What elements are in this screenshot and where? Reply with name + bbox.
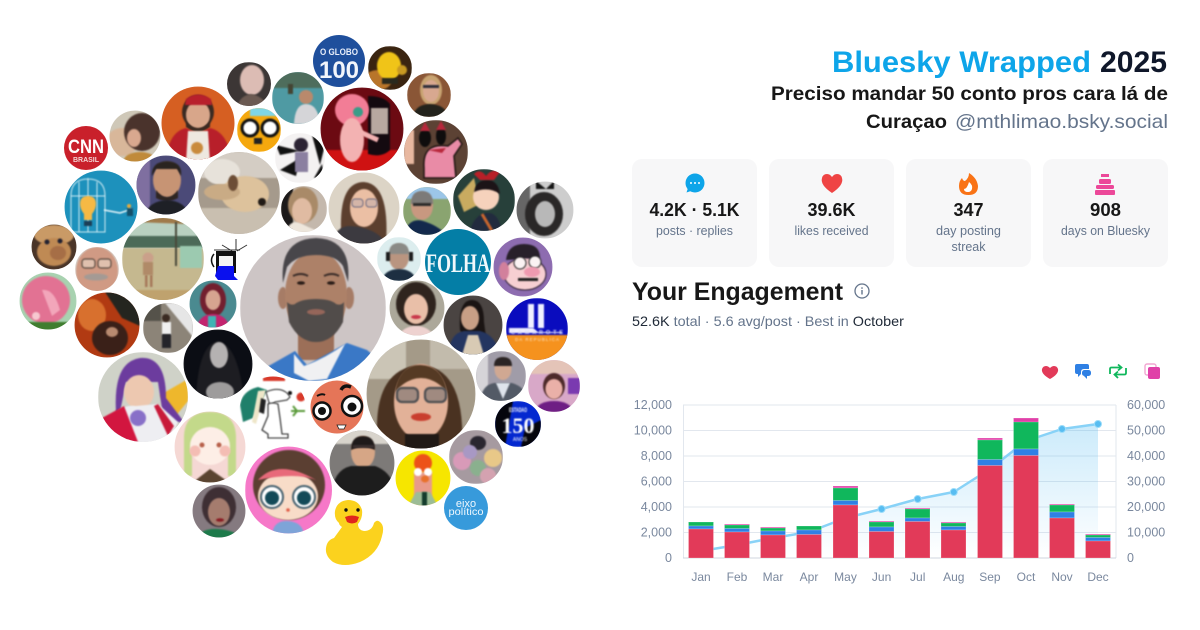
avatar: Beaker muppet on yellow <box>395 450 451 506</box>
avatar: curly haired woman with glasses <box>366 339 476 450</box>
stat card: posts and replies <box>632 159 757 267</box>
avatar: man in grey suit <box>476 351 528 401</box>
right axis: 60,000 <box>1127 398 1165 412</box>
avatar: curly haired woman smiling <box>389 280 445 336</box>
avatar: woman with purple cosplay wig <box>98 352 188 444</box>
subtitle: Preciso mandar 50 conto pros cara lá de <box>771 83 1168 105</box>
icon: chat bubble <box>686 174 704 192</box>
avatar: TV doodle <box>212 239 247 280</box>
month labels: Apr <box>800 570 818 584</box>
avatar: woman in pink-tinted room <box>528 360 580 412</box>
avatar: woman in navy blazer <box>443 295 503 355</box>
right axis: 30,000 <box>1127 474 1165 488</box>
stat card: day posting streak: day posting <box>936 224 1001 238</box>
avatar: Estadao 150 anos logo: ESTADÃO <box>509 407 527 414</box>
combo chart: monthly engagement bars with cumulative line <box>634 398 1165 584</box>
stat card: posts and replies: posts · replies <box>656 224 733 238</box>
avatar: man in black jacket <box>329 430 397 496</box>
subtitle: Curaçao <box>866 111 947 133</box>
avatar: girl with dark hair <box>226 62 272 108</box>
handle: @mthlimao.bsky.social <box>955 111 1168 133</box>
avatar: woman in black and white <box>516 181 574 239</box>
avatar: woman portrait <box>281 186 327 232</box>
avatar: Folha logo <box>425 229 491 295</box>
avatar: Estadao 150 anos logo: 150 <box>502 413 534 438</box>
avatar: older man with moustache <box>75 247 119 295</box>
right axis: 50,000 <box>1127 424 1165 438</box>
avatar: Miss Piggy <box>31 224 77 270</box>
engagement summary: 52.6K total · 5.6 avg/post · Best in October <box>632 313 904 329</box>
avatar: Folha logo: FOLHA <box>426 249 490 278</box>
avatar: chibi woman with glasses on pink <box>245 446 333 534</box>
right axis: 20,000 <box>1127 500 1165 514</box>
month labels: Oct <box>1017 570 1036 584</box>
avatar: O Globo 100 logo: 100 <box>319 57 359 84</box>
avatar: Estadao 150 anos logo <box>495 401 541 447</box>
month labels: May <box>834 570 857 584</box>
avatar: orange cartoon face <box>310 380 364 434</box>
avatar: woman with dark hair <box>110 110 160 162</box>
right axis: 10,000 <box>1127 526 1165 540</box>
icon: likes legend heart <box>1042 366 1058 379</box>
month labels: Jun <box>872 570 891 584</box>
icon: info <box>855 284 869 298</box>
stat card: days on Bluesky: 908 <box>1090 200 1121 220</box>
month labels: Mar <box>763 570 783 584</box>
avatar: O Globo 100 logo <box>313 35 365 87</box>
stat card: day posting streak: 347 <box>954 200 984 220</box>
left axis: 4,000 <box>641 500 672 514</box>
month labels: Jul <box>910 570 925 584</box>
avatar: CNN Brasil logo: CNN <box>68 137 104 158</box>
avatar: light bulb in a cage <box>64 170 140 246</box>
avatar: yellow chick robot <box>364 46 412 90</box>
avatar: man with headset <box>377 237 421 281</box>
avatar: woman with plush toys <box>449 430 503 484</box>
avatar: Eixo Politico logo: político <box>448 506 484 518</box>
month labels: Aug <box>943 570 964 584</box>
avatar: Kiki with a broom <box>453 169 515 231</box>
avatar: man with dark hair <box>136 155 196 215</box>
avatar: main profile photo, man with grey beard <box>240 235 386 383</box>
left axis <box>634 398 672 565</box>
month labels: Dec <box>1087 570 1109 584</box>
avatar: O Globo 100 logo: O GLOBO <box>320 47 358 57</box>
icon: replies legend bubbles <box>1075 364 1091 379</box>
month labels: Nov <box>1051 570 1073 584</box>
stacked bars <box>688 418 1110 558</box>
title: Bluesky Wrapped <box>832 46 1091 79</box>
right axis: 0 <box>1127 551 1134 565</box>
avatar: woman with red hair <box>189 280 237 328</box>
left axis: 0 <box>665 551 672 565</box>
stat card: days on Bluesky: days on Bluesky <box>1061 224 1151 238</box>
avatar: child on the beach <box>122 216 204 304</box>
avatar: selfie at a lake <box>272 72 324 124</box>
left axis: 6,000 <box>641 474 672 488</box>
avatar: anime girl with green hair <box>174 411 246 483</box>
stat card: likes received <box>769 159 894 267</box>
avatar: Eixo Politico logo: eixo <box>456 498 476 510</box>
cumulative line <box>701 420 1102 551</box>
avatar: dog lying on a sofa <box>198 152 280 234</box>
avatar: cartoon face on purple <box>493 237 553 297</box>
stat card: day posting streak: streak <box>952 240 986 254</box>
left axis: 2,000 <box>641 526 672 540</box>
month labels: Feb <box>727 570 748 584</box>
avatar: man with glasses in front of a lake <box>403 187 451 235</box>
icon: cake <box>1095 174 1115 195</box>
avatar: Camarote da Republica logo <box>506 298 568 361</box>
avatar: goth woman in black and white <box>183 329 253 402</box>
icon: quotes legend squares <box>1145 364 1160 379</box>
chart legend <box>1042 364 1160 379</box>
stat card: posts and replies: 4.2K · 5.1K <box>650 200 740 220</box>
title: 2025 <box>1100 46 1167 79</box>
avatar: Camarote da Republica logo: DA REPUBLICA <box>515 337 559 342</box>
right axis: 40,000 <box>1127 449 1165 463</box>
avatar: CNN Brasil logo: BRASIL <box>73 157 100 164</box>
month labels <box>691 570 1109 584</box>
avatar: Eixo Politico logo <box>444 486 488 530</box>
subtitle <box>771 83 1168 133</box>
left axis: 12,000 <box>634 398 672 412</box>
month labels: Sep <box>979 570 1001 584</box>
stat card: likes received: 39.6K <box>808 200 856 220</box>
avatar: woman with dark curly hair and green top <box>192 484 246 538</box>
icon: flame <box>959 173 978 195</box>
stat card: day posting streak <box>906 159 1031 267</box>
avatar: woman with long hair and glasses <box>328 172 400 244</box>
avatar: anime black and white <box>275 133 325 183</box>
avatar: Camarote da Republica logo: CAMAROTE <box>511 330 563 336</box>
avatar: pink cartoon creature <box>19 272 77 332</box>
avatar: Jake the dog glasses <box>237 108 281 152</box>
month labels: Jan <box>691 570 711 584</box>
section heading: Your Engagement <box>632 278 844 306</box>
left axis: 10,000 <box>634 424 672 438</box>
avatar: person walking on a walkway <box>143 303 193 353</box>
left axis: 8,000 <box>641 449 672 463</box>
avatar: rubber duck <box>326 500 383 565</box>
right axis <box>1127 398 1165 565</box>
avatar: blurred red close-up <box>74 292 140 358</box>
stat card: likes received: likes received <box>794 224 869 238</box>
avatar: pink bird with christmas hats <box>404 120 468 184</box>
avatar bubble cluster <box>19 35 580 565</box>
avatar: pink doll beside a red bottle <box>320 87 404 172</box>
avatar: Snoopy <box>240 376 306 440</box>
icon: heart <box>822 174 842 193</box>
stat card: days on Bluesky <box>1043 159 1168 267</box>
avatar: CNN Brasil logo <box>64 126 108 170</box>
avatar: blonde woman in glasses <box>407 73 451 117</box>
header <box>771 46 1168 133</box>
avatar: Estadao 150 anos logo: ANOS <box>513 437 528 443</box>
icon: reposts legend arrows <box>1110 364 1126 378</box>
avatar: man with red cap on orange <box>160 86 236 162</box>
cumulative area <box>701 424 1098 558</box>
